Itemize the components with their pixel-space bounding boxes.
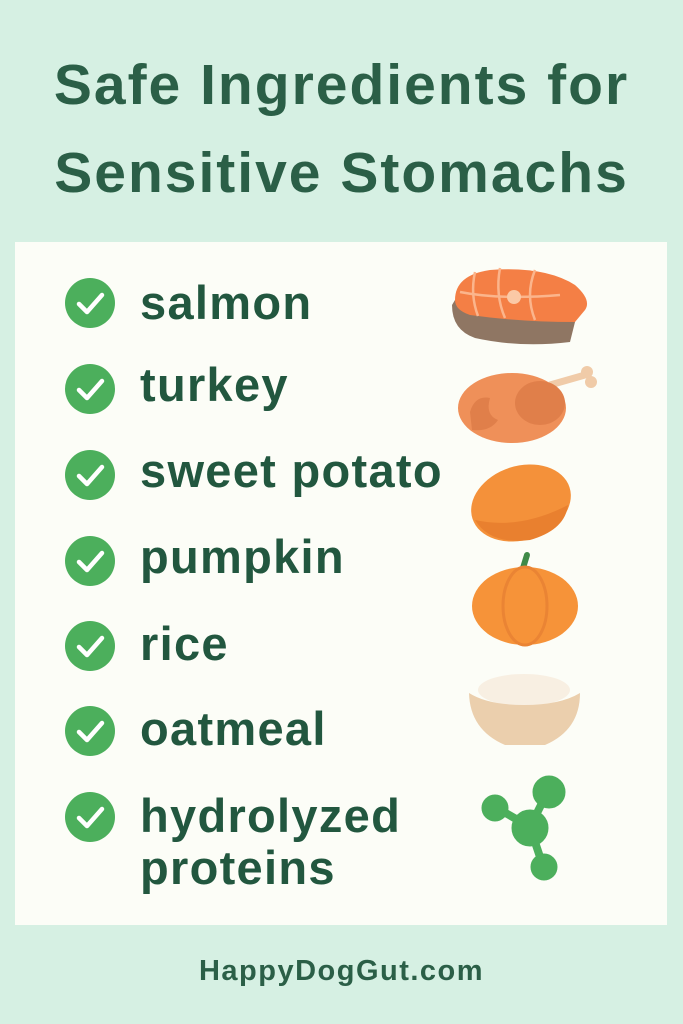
item: rice: rice (140, 617, 229, 670)
panel: ingredients list (15, 242, 667, 925)
item: turkey (65, 358, 289, 414)
item: turkey: turkey (140, 358, 289, 411)
icon: pumpkin (472, 555, 578, 645)
item: salmon: salmon (140, 276, 312, 329)
title (54, 53, 629, 205)
icon: turkey (458, 366, 597, 443)
item: pumpkin: pumpkin (140, 530, 345, 583)
icon: salmon (452, 268, 587, 344)
title: Safe Ingredients for (54, 53, 629, 117)
icon: rice bowl (469, 674, 580, 745)
item: rice (65, 617, 229, 671)
icon: molecule (482, 776, 565, 880)
icons (452, 268, 597, 880)
icon: sweet potato (461, 452, 581, 554)
item: pumpkin (65, 530, 345, 586)
item: salmon (65, 276, 312, 329)
item: hydrolyzed proteins (65, 789, 401, 894)
item: hydrolyzed proteins: hydrolyzed (140, 789, 401, 842)
item: sweet potato: sweet potato (140, 444, 443, 497)
title: Sensitive Stomachs (54, 141, 629, 205)
item: hydrolyzed proteins: proteins (140, 841, 336, 894)
item: oatmeal: oatmeal (140, 702, 327, 755)
footer: website: HappyDogGut.com (199, 955, 484, 987)
